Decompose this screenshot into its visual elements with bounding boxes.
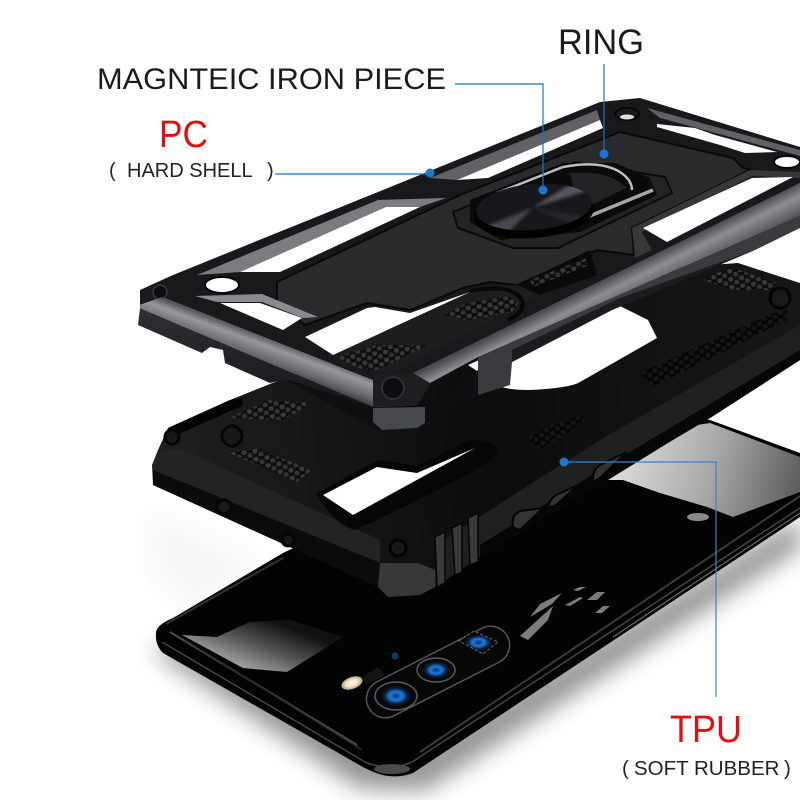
sub label: ) bbox=[267, 160, 274, 182]
glass rim highlights bbox=[162, 496, 800, 767]
TPU right wall bbox=[435, 325, 800, 587]
TPU body bbox=[152, 263, 800, 597]
dot bbox=[426, 168, 434, 178]
sub label: HARD SHELL bbox=[127, 160, 253, 182]
white window right bbox=[643, 177, 793, 242]
faint shadow under case bbox=[150, 510, 270, 610]
PC hard shell bbox=[138, 98, 800, 430]
inner panel bbox=[277, 132, 750, 325]
lower corner bbox=[373, 407, 425, 430]
label: magnetic iron piece: MAGNTEIC IRON PIECE bbox=[97, 63, 446, 96]
label: ring: RING bbox=[558, 23, 644, 62]
label: TPU soft rubber bbox=[560, 458, 791, 780]
TPU case bbox=[152, 263, 800, 597]
TPU lower wall bbox=[153, 470, 380, 587]
label: PC hard shell: PC bbox=[159, 114, 208, 156]
grip slot bbox=[517, 250, 597, 295]
ring loop bbox=[497, 164, 632, 193]
right gray band bbox=[373, 183, 800, 407]
flash bar bbox=[362, 667, 385, 685]
TPU upper rail edge bbox=[168, 398, 243, 437]
right window frame bbox=[632, 170, 800, 258]
phone body bbox=[156, 400, 800, 776]
side buttons bbox=[513, 452, 627, 530]
corner cap bbox=[373, 373, 430, 407]
shell right underside bbox=[478, 215, 800, 395]
reflection: lower left bbox=[182, 620, 343, 672]
bottom edge glint bbox=[374, 764, 410, 774]
gray rail left bbox=[197, 198, 446, 275]
white window top bbox=[457, 120, 603, 180]
dot bbox=[560, 458, 568, 466]
rib block bbox=[435, 513, 478, 587]
shell left underside bbox=[138, 308, 373, 428]
white window top right bbox=[657, 124, 777, 153]
metal disc bbox=[472, 183, 596, 243]
flash bbox=[340, 674, 364, 692]
label: TPU soft rubber: TPU bbox=[670, 709, 742, 751]
label: magnetic iron piece bbox=[97, 63, 548, 194]
TPU corner bbox=[378, 563, 435, 597]
hex grip patches bbox=[227, 448, 312, 482]
TPU left rim bbox=[153, 450, 380, 563]
phone bbox=[150, 400, 800, 790]
leader line bbox=[564, 462, 716, 697]
white window left bbox=[240, 207, 420, 272]
lens 2 bbox=[417, 658, 455, 682]
dot bbox=[538, 186, 548, 194]
shell lower wall bbox=[282, 370, 478, 430]
ring base plate bbox=[453, 162, 672, 248]
camera cutout bbox=[305, 292, 470, 355]
label: ring bbox=[558, 23, 644, 158]
dot bbox=[600, 150, 608, 158]
small reflected marks bbox=[520, 587, 610, 640]
phone shadow bbox=[158, 518, 800, 790]
shell face bbox=[140, 98, 800, 380]
corner screw bbox=[382, 377, 404, 399]
camera cutout frame bbox=[316, 440, 498, 530]
hex grip patches bbox=[443, 296, 518, 320]
label: PC hard shell bbox=[109, 114, 434, 182]
screws bbox=[165, 288, 790, 556]
left gray band bbox=[140, 297, 373, 407]
sub label: ( bbox=[622, 757, 629, 780]
gray rail top bbox=[430, 110, 600, 180]
sub label: ) bbox=[784, 757, 791, 780]
sub label: SOFT RUBBER bbox=[634, 757, 779, 780]
lens 1 bbox=[375, 682, 417, 710]
lens 3 bbox=[459, 631, 498, 654]
gray rail bottom left bbox=[195, 294, 318, 318]
leader line bbox=[455, 84, 543, 190]
bay rim bbox=[470, 288, 523, 320]
white window bottom left bbox=[220, 303, 302, 330]
reflection: upper right bbox=[608, 423, 800, 517]
gray rail top right bbox=[647, 108, 800, 156]
camera island bbox=[360, 620, 516, 724]
camera bay bbox=[333, 285, 540, 372]
ring inner bbox=[570, 173, 626, 212]
sensor bbox=[392, 652, 398, 660]
sub label: ( bbox=[109, 160, 116, 182]
white rear opening bbox=[468, 305, 657, 390]
leader line bbox=[603, 64, 605, 154]
camera cutout bbox=[323, 448, 475, 515]
leader line bbox=[275, 173, 430, 175]
corner holes bbox=[205, 277, 239, 293]
ring holder bbox=[470, 163, 657, 240]
power button glint bbox=[687, 513, 709, 521]
